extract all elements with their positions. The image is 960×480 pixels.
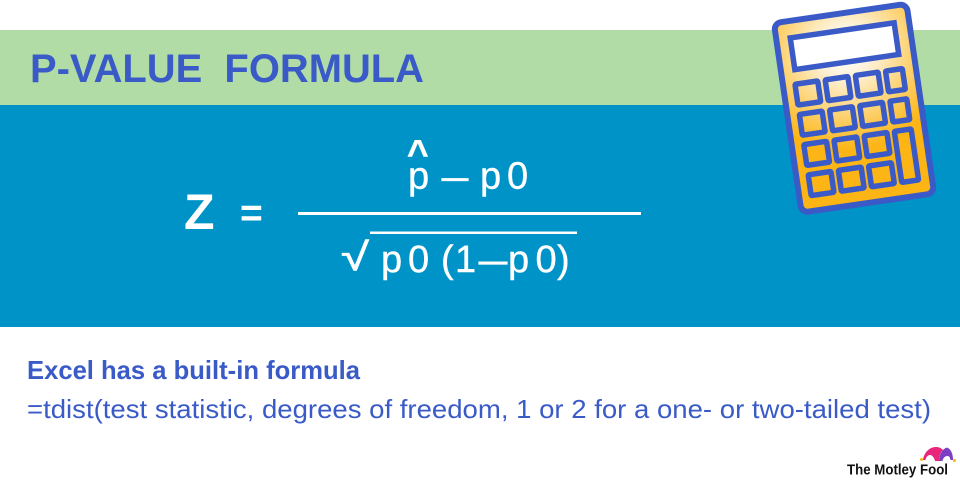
logo wordmark: The Motley Fool [847, 462, 948, 478]
denominator: square root of p0 (1 - p0): (1 [441, 239, 476, 281]
formula left side: Z equals: Z [184, 184, 215, 240]
icon: jester hat [920, 447, 956, 462]
calculator display [790, 23, 899, 70]
text block: Excel formula [27, 355, 931, 424]
formula left side: Z equals [184, 184, 263, 240]
icon: calculator [774, 4, 934, 213]
text block: Excel formula: =tdist(test statistic, degrees of freedom, 1 or 2 for a one- or two-tailed test) [27, 394, 931, 424]
denominator: square root of p0 (1 - p0): p0) [508, 239, 570, 281]
calculator keys [795, 69, 919, 196]
calculator body [774, 4, 934, 213]
text block: Excel formula: Excel has a built-in formula [27, 355, 361, 385]
denominator: square root of p0 (1 - p0): √ [341, 235, 369, 279]
panel: formula [0, 105, 960, 327]
logo: The Motley Fool [847, 447, 956, 478]
numerator: p-hat minus p0: ^ [407, 133, 429, 174]
title band [0, 30, 960, 105]
numerator: p-hat minus p0 [407, 133, 528, 198]
numerator: p-hat minus p0: — [442, 162, 468, 192]
denominator: square root of p0 (1 - p0): p0 [381, 239, 429, 281]
numerator: p-hat minus p0: p [408, 156, 429, 198]
numerator: p-hat minus p0: p0 [480, 156, 528, 198]
formula left side: Z equals: = [240, 192, 263, 235]
denominator: square root of p0 (1 - p0) [341, 232, 577, 281]
fraction bar [298, 212, 641, 215]
denominator: square root of p0 (1 - p0): — [479, 245, 507, 276]
heading: P-value formula: P-VALUE FORMULA [30, 47, 424, 91]
